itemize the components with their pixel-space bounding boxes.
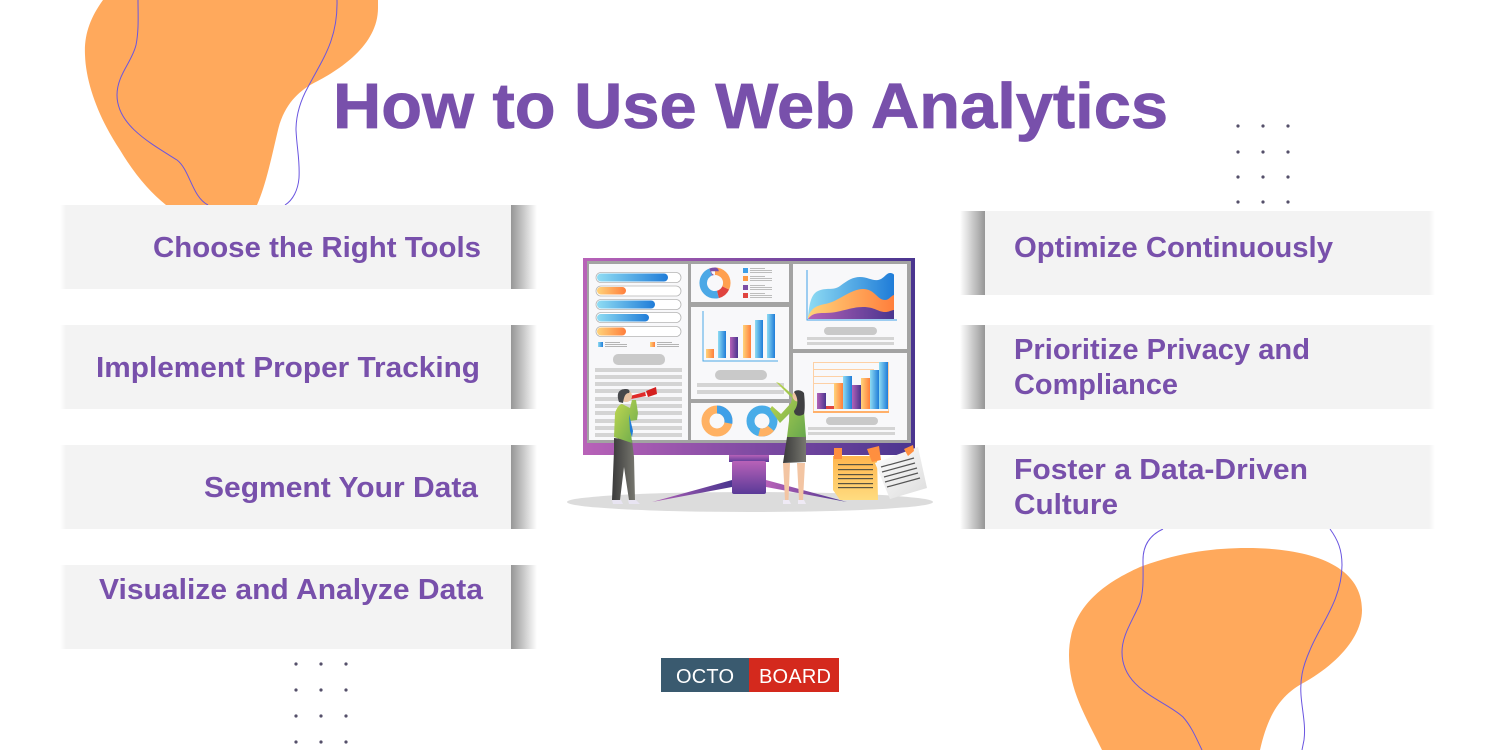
decorative blob: top left	[85, 0, 378, 205]
panel: Prioritize Privacy and Compliance	[960, 325, 1435, 409]
panel: Prioritize Privacy and Compliance: Compliance	[1014, 369, 1178, 401]
monitor stand	[652, 455, 847, 502]
sticky note	[833, 446, 881, 500]
title: How to Use Web Analytics	[333, 70, 1168, 142]
man with telescope	[612, 387, 657, 504]
dashboard panel: donut and legend	[691, 264, 789, 302]
dashboard panel: area chart	[793, 264, 907, 349]
panel: Prioritize Privacy and Compliance: Prioritize Privacy and	[1014, 334, 1310, 366]
panel: Optimize Continuously	[960, 211, 1435, 295]
panel: Visualize and Analyze Data	[60, 565, 537, 649]
logo: OCTOBOARD: OCTO	[676, 666, 734, 688]
dashboard panel: progress bars and text	[589, 264, 688, 440]
dot grid: top right	[1236, 124, 1290, 204]
logo: OCTOBOARD: BOARD	[759, 666, 831, 688]
woman pointing at chart	[770, 382, 806, 504]
panel: Foster a Data-Driven Culture	[960, 445, 1435, 529]
dashboard panel: two donuts	[691, 403, 789, 440]
panel: Choose the Right Tools: Choose the Right Tools	[153, 232, 481, 264]
panel: Visualize and Analyze Data: Visualize and Analyze Data	[99, 574, 484, 606]
panel: Foster a Data-Driven Culture: Culture	[1014, 489, 1118, 521]
panel: Segment Your Data: Segment Your Data	[204, 472, 479, 504]
panel: Implement Proper Tracking: Implement Proper Tracking	[96, 352, 480, 384]
logo: OCTOBOARD	[661, 658, 839, 692]
panel: Optimize Continuously: Optimize Continuously	[1014, 232, 1333, 264]
dashboard panel: bar chart	[691, 307, 789, 399]
monitor frame	[583, 258, 915, 455]
paper note	[875, 445, 927, 499]
dashboard panel: framed bar chart	[793, 353, 907, 440]
panel: Segment Your Data	[60, 445, 537, 529]
panel: Foster a Data-Driven Culture: Foster a Data-Driven	[1014, 454, 1308, 486]
decorative blob: bottom right	[1069, 529, 1362, 750]
panel: Choose the Right Tools	[60, 205, 537, 289]
illustration: analytics dashboard with two people	[567, 258, 933, 512]
dot grid: bottom left	[294, 662, 348, 744]
panel: Implement Proper Tracking	[60, 325, 537, 409]
